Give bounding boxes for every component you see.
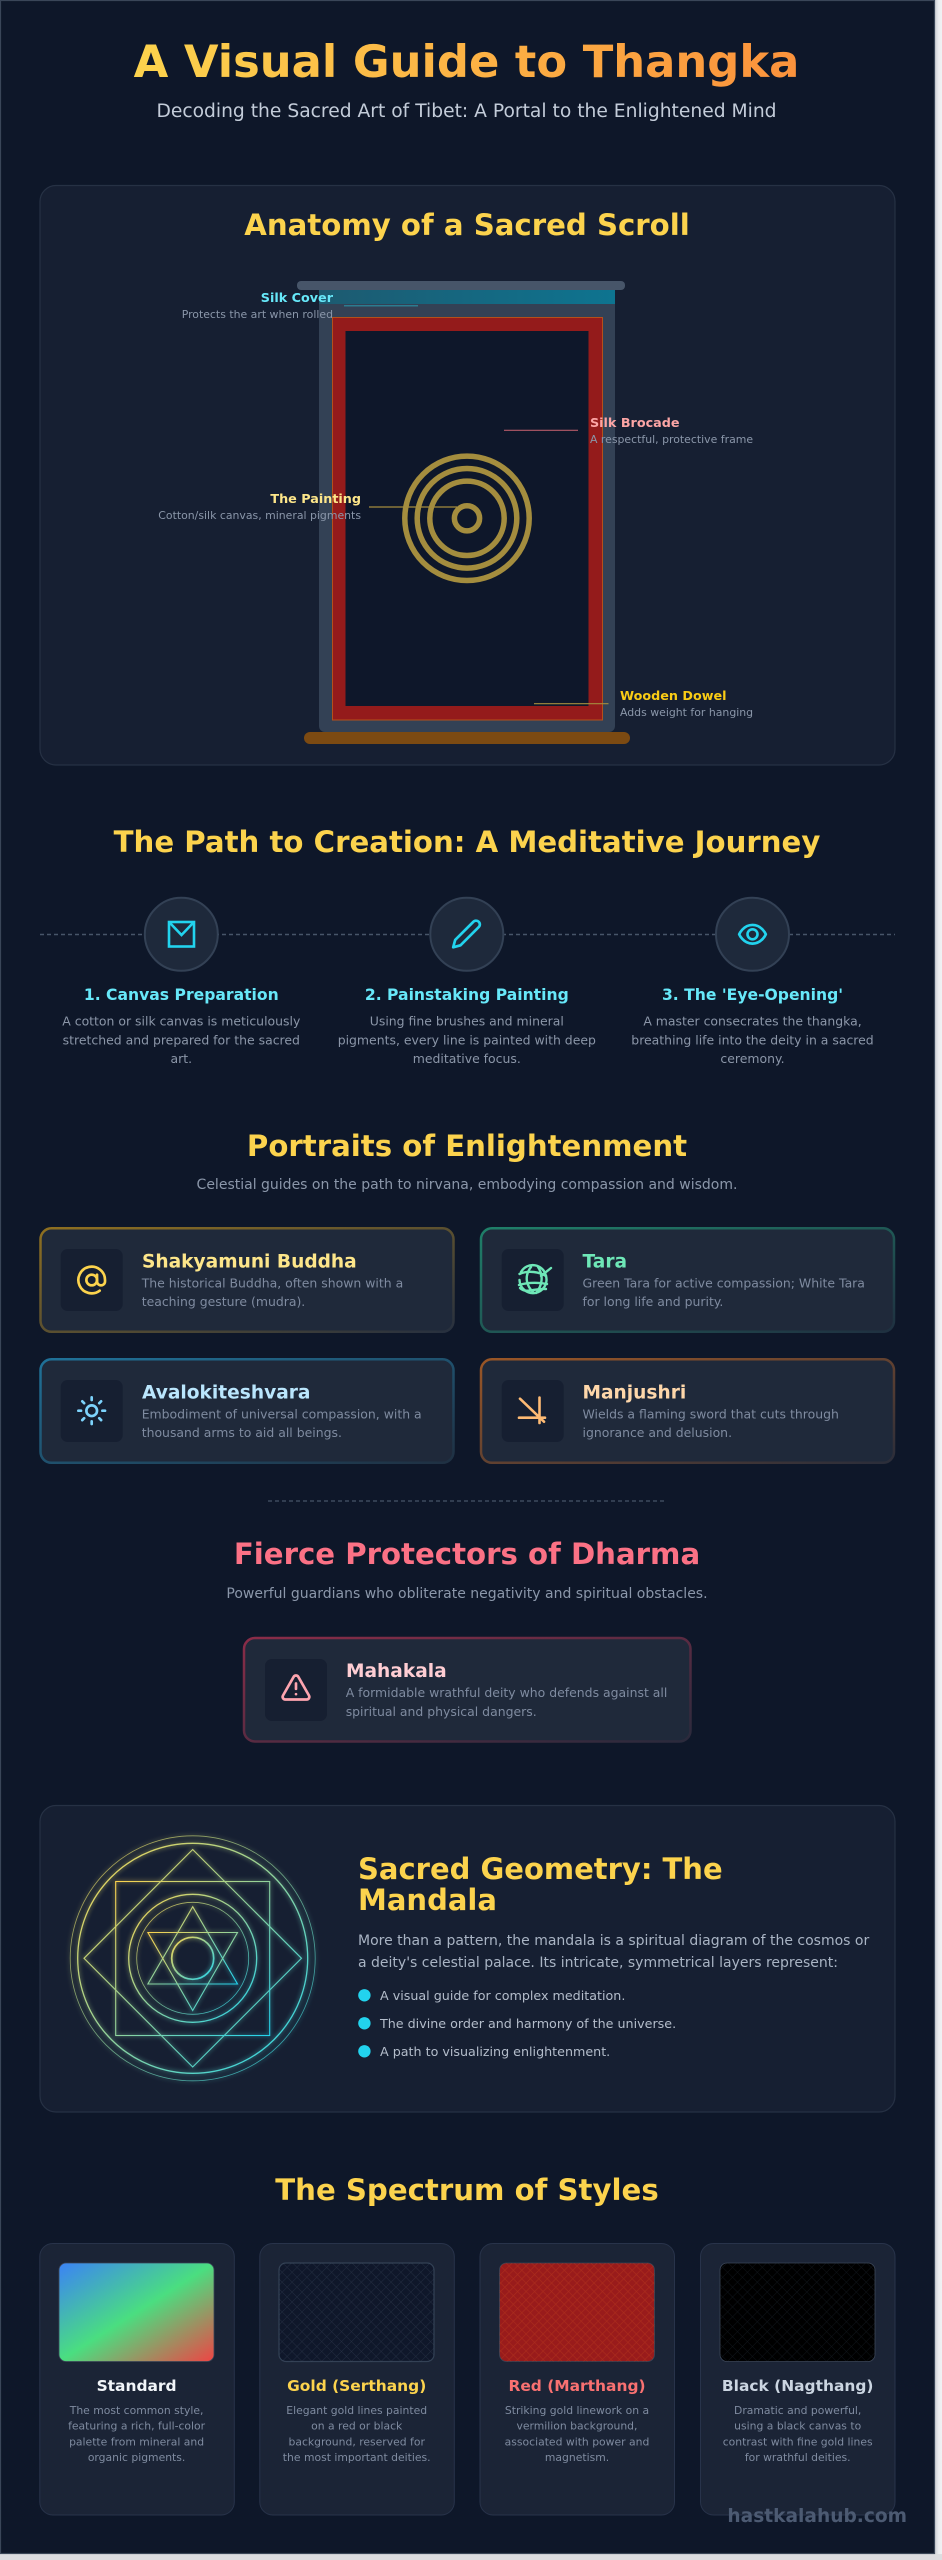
style title: Black (Nagthang) bbox=[722, 2377, 873, 2395]
style text: associated with power and bbox=[505, 2435, 649, 2448]
section: portraits of enlightenment bbox=[40, 1129, 894, 1463]
style title: Standard bbox=[97, 2377, 177, 2395]
style card: standard bbox=[40, 2244, 234, 2515]
mandala heading: Mandala bbox=[358, 1883, 497, 1917]
step 3 bbox=[631, 898, 874, 1066]
step 1 bbox=[62, 898, 300, 1066]
style card: gold bbox=[260, 2244, 454, 2515]
step text: art. bbox=[171, 1051, 192, 1066]
card text: Green Tara for active compassion; White Tara bbox=[582, 1275, 865, 1290]
step text: meditative focus. bbox=[413, 1051, 521, 1066]
swatch: standard bbox=[59, 2263, 214, 2362]
style card: black bbox=[700, 2244, 895, 2515]
icon: arrow sword bbox=[502, 1380, 564, 1442]
callout: wooden dowel: Wooden Dowel bbox=[620, 689, 727, 704]
card text: Embodiment of universal compassion, with a bbox=[142, 1406, 422, 1421]
style text: for wrathful deities. bbox=[745, 2451, 851, 2464]
step text: Using fine brushes and mineral bbox=[370, 1014, 564, 1029]
heading: spectrum: The Spectrum of Styles bbox=[275, 2173, 659, 2207]
callout: silk brocade: Silk Brocade bbox=[590, 416, 680, 431]
callout: the painting: The Painting bbox=[270, 492, 361, 507]
swatch: red bbox=[500, 2263, 654, 2362]
swatch: gold bbox=[279, 2263, 434, 2362]
step text: stretched and prepared for the sacred bbox=[63, 1032, 300, 1047]
callout: silk brocade: A respectful, protective frame bbox=[590, 433, 753, 446]
subheading: portraits: Celestial guides on the path to nirvana, embodying compassion and wisdom. bbox=[197, 1177, 737, 1193]
callout: silk brocade bbox=[504, 416, 753, 446]
subheading: fierce protectors: Powerful guardians who obliterate negativity and spiritual obstacles. bbox=[226, 1586, 708, 1602]
icon: brush bbox=[430, 898, 503, 971]
subtitle: Decoding the Sacred Art of Tibet: A Portal to the Enlightened Mind bbox=[156, 101, 777, 122]
silk brocade bbox=[332, 318, 602, 720]
heading: anatomy: Anatomy of a Sacred Scroll bbox=[244, 208, 690, 242]
style text: vermilion background, bbox=[517, 2420, 637, 2433]
step text: ceremony. bbox=[720, 1051, 785, 1066]
callout: wooden dowel bbox=[534, 689, 753, 719]
step title: 2. Painstaking Painting bbox=[365, 986, 569, 1004]
card text: thousand arms to aid all beings. bbox=[142, 1425, 342, 1440]
style text: featuring a rich, full-color bbox=[68, 2420, 206, 2433]
mandala diagram bbox=[70, 1836, 315, 2081]
top rod bbox=[297, 281, 625, 290]
icon: canvas bbox=[145, 898, 218, 971]
step text: breathing life into the deity in a sacred bbox=[631, 1032, 874, 1047]
swatch: black bbox=[720, 2263, 875, 2362]
icon: sun bbox=[61, 1380, 123, 1442]
card text: The historical Buddha, often shown with a bbox=[141, 1275, 403, 1290]
card text: Wields a flaming sword that cuts through bbox=[582, 1406, 839, 1421]
style text: The most common style, bbox=[69, 2404, 203, 2417]
step text: A cotton or silk canvas is meticulously bbox=[62, 1014, 300, 1029]
step text: A master consecrates the thangka, bbox=[643, 1014, 862, 1029]
heading: fierce protectors: Fierce Protectors of Dharma bbox=[234, 1537, 700, 1571]
icon: globe bbox=[502, 1249, 564, 1311]
card text: spiritual and physical dangers. bbox=[346, 1704, 537, 1719]
bullet list: The divine order and harmony of the universe. bbox=[379, 2016, 676, 2031]
scroll backing bbox=[319, 290, 615, 732]
section: fierce protectors bbox=[226, 1501, 708, 1742]
mandala text: a deity's celestial palace. Its intricate, symmetrical layers represent: bbox=[358, 1955, 838, 1971]
section: spectrum of styles bbox=[40, 2173, 895, 2515]
card text: ignorance and delusion. bbox=[582, 1425, 732, 1440]
step title: 3. The 'Eye-Opening' bbox=[662, 986, 843, 1004]
icon: at sign bbox=[61, 1249, 123, 1311]
card: Mahakala bbox=[244, 1638, 690, 1742]
section: path to creation bbox=[40, 825, 895, 1066]
callout: silk cover: Protects the art when rolled bbox=[182, 308, 333, 321]
callout: silk cover: Silk Cover bbox=[261, 291, 334, 306]
style title: Red (Marthang) bbox=[508, 2377, 646, 2395]
style text: on a red or black bbox=[311, 2420, 403, 2433]
style title: Gold (Serthang) bbox=[287, 2377, 426, 2395]
style text: background, reserved for bbox=[288, 2435, 425, 2448]
style text: palette from mineral and bbox=[69, 2435, 204, 2448]
callout: the painting: Cotton/silk canvas, mineral pigments bbox=[158, 509, 361, 522]
bullet list bbox=[358, 1988, 676, 2059]
style text: Striking gold linework on a bbox=[505, 2404, 649, 2417]
heading: path to creation: The Path to Creation: A Meditative Journey bbox=[114, 825, 820, 859]
card: Shakyamuni Buddha bbox=[40, 1228, 454, 1332]
card title: Manjushri bbox=[582, 1383, 686, 1404]
style card: red bbox=[480, 2244, 674, 2515]
callout: wooden dowel: Adds weight for hanging bbox=[620, 706, 753, 719]
icon: eye bbox=[716, 898, 789, 971]
card text: teaching gesture (mudra). bbox=[142, 1294, 305, 1309]
card title: Tara bbox=[582, 1252, 627, 1273]
style text: Elegant gold lines painted bbox=[286, 2404, 427, 2417]
callout: silk cover bbox=[182, 291, 418, 321]
card title: Mahakala bbox=[346, 1661, 447, 1682]
painting canvas bbox=[346, 331, 588, 706]
diagram: scroll bbox=[297, 281, 630, 744]
step 2 bbox=[338, 898, 596, 1066]
mandala text: More than a pattern, the mandala is a spiritual diagram of the cosmos or bbox=[358, 1933, 869, 1949]
step title: 1. Canvas Preparation bbox=[84, 986, 279, 1004]
card title: Shakyamuni Buddha bbox=[142, 1252, 357, 1273]
style text: magnetism. bbox=[545, 2451, 609, 2464]
panel: sacred geometry mandala bbox=[40, 1806, 895, 2112]
bullet list: A visual guide for complex meditation. bbox=[380, 1988, 625, 2003]
callout: the painting bbox=[158, 492, 457, 522]
card: Avalokiteshvara bbox=[40, 1359, 454, 1463]
style text: the most important deities. bbox=[283, 2451, 431, 2464]
panel: anatomy of a sacred scroll bbox=[40, 186, 895, 765]
style text: using a black canvas to bbox=[734, 2420, 862, 2433]
card title: Avalokiteshvara bbox=[142, 1383, 310, 1404]
mandala heading: Sacred Geometry: The bbox=[358, 1852, 723, 1886]
icon: alert triangle bbox=[265, 1659, 327, 1721]
bullet list: A path to visualizing enlightenment. bbox=[380, 2044, 610, 2059]
header bbox=[134, 35, 799, 122]
silk cover bbox=[319, 290, 615, 304]
card text: for long life and purity. bbox=[582, 1294, 723, 1309]
step text: pigments, every line is painted with deep bbox=[338, 1032, 596, 1047]
heading: portraits: Portraits of Enlightenment bbox=[247, 1129, 687, 1163]
watermark: hastkalahub.com bbox=[727, 2506, 907, 2527]
process line bbox=[40, 934, 895, 936]
title: A Visual Guide to Thangka bbox=[134, 35, 799, 88]
card text: A formidable wrathful deity who defends against all bbox=[346, 1685, 667, 1700]
painting rings bbox=[405, 456, 529, 580]
style text: Dramatic and powerful, bbox=[734, 2404, 861, 2417]
card: Manjushri bbox=[481, 1359, 894, 1463]
card: Tara bbox=[481, 1228, 894, 1332]
style text: contrast with fine gold lines bbox=[723, 2435, 873, 2448]
wooden dowel bbox=[304, 732, 630, 744]
style text: organic pigments. bbox=[88, 2451, 185, 2464]
